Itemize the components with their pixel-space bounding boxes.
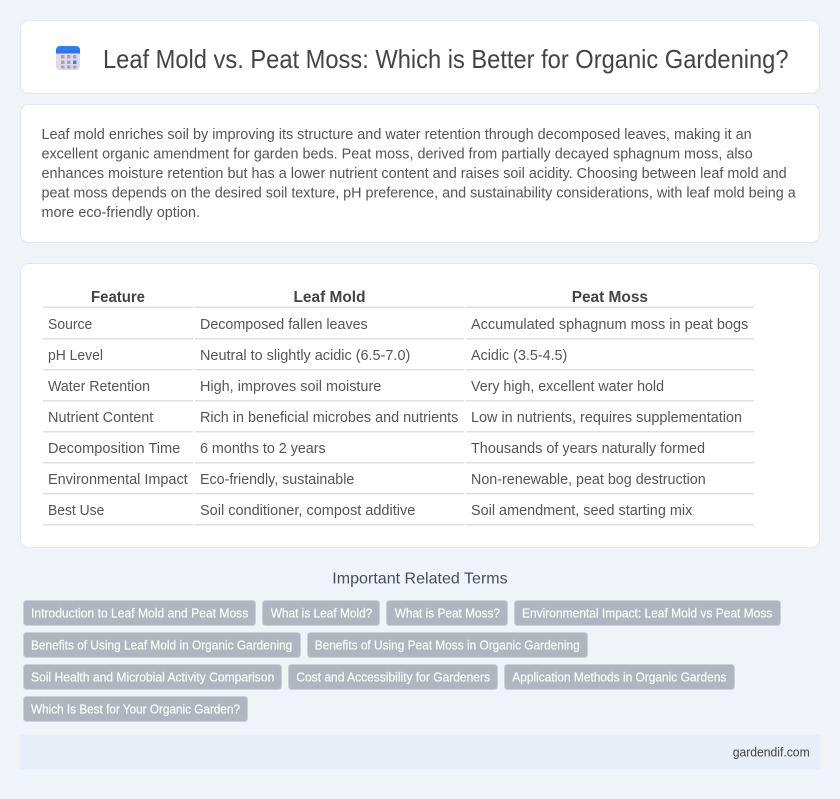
row: nutrient content: Nutrient Content <box>48 410 153 426</box>
row: source: Decomposed fallen leaves <box>200 317 368 333</box>
intro paragraph: Leaf mold enriches soil by improving its structure and water retention through decomposed leaves, making it an <box>42 127 752 143</box>
tag: benefits of peat moss: Benefits of Using Peat Moss in Organic Gardening <box>315 637 580 652</box>
tag: cost and accessibility <box>288 664 498 690</box>
row: environmental impact: Environmental Impact <box>48 472 188 488</box>
panel: related term tags <box>24 600 780 722</box>
row: source: Source <box>48 317 92 333</box>
tag: what is leaf mold: What is Leaf Mold? <box>271 605 372 620</box>
row: pH level <box>43 348 754 370</box>
tag: benefits of peat moss <box>308 632 588 658</box>
row: pH level: pH Level <box>48 348 103 364</box>
intro paragraph: peat moss depends on the desired soil texture, pH preference, and sustainability considerations, with leaf mold being a <box>42 186 796 202</box>
row: water retention: Very high, excellent water hold <box>471 379 664 395</box>
row: best use <box>43 503 754 526</box>
table header row <box>43 289 754 308</box>
row: source: Accumulated sphagnum moss in peat bogs <box>471 317 748 333</box>
intro paragraph: more eco-friendly option. <box>42 205 200 221</box>
table header row: Leaf Mold <box>294 289 366 306</box>
icon: calendar <box>56 46 80 70</box>
table header row: Peat Moss <box>572 289 648 306</box>
row: water retention <box>43 379 754 402</box>
row: decomposition time: 6 months to 2 years <box>200 441 326 457</box>
row: nutrient content <box>43 410 754 432</box>
tag: which is best: Which Is Best for Your Organic Garden? <box>31 701 240 716</box>
tag: what is leaf mold <box>262 600 380 626</box>
tag: what is peat moss <box>386 600 508 626</box>
row: best use: Soil conditioner, compost additive <box>200 503 415 519</box>
intro paragraph: excellent organic amendment for garden beds. Peat moss, derived from partially decayed sphagnum moss, also <box>42 146 753 162</box>
tag: environmental impact: Environmental Impact: Leaf Mold vs Peat Moss <box>522 605 772 620</box>
row: best use: Best Use <box>48 503 104 519</box>
heading: important related terms: Important Related Terms <box>332 570 508 587</box>
table header row: Feature <box>91 289 145 306</box>
tag: what is peat moss: What is Peat Moss? <box>395 605 500 620</box>
tag: application methods <box>504 664 734 690</box>
row: environmental impact <box>43 472 754 494</box>
row: best use: Soil amendment, seed starting mix <box>471 503 693 519</box>
row: decomposition time <box>43 441 754 464</box>
row: nutrient content: Rich in beneficial microbes and nutrients <box>200 410 458 426</box>
panel: comparison table <box>20 264 820 548</box>
tag: soil health <box>24 664 282 690</box>
intro paragraph <box>42 127 796 221</box>
tag: which is best <box>24 696 248 722</box>
row: source <box>43 317 754 340</box>
intro paragraph: enhances moisture retention but has a lower nutrient content and raises soil acidity. Choosing between leaf mold and <box>42 166 787 182</box>
row: environmental impact: Eco-friendly, sustainable <box>200 472 354 488</box>
tag: soil health: Soil Health and Microbial Activity Comparison <box>31 669 274 684</box>
tag: benefits of leaf mold <box>24 632 300 658</box>
row: environmental impact: Non-renewable, peat bog destruction <box>471 472 706 488</box>
footer bar <box>20 735 820 769</box>
row: pH level: Neutral to slightly acidic (6.5-7.0) <box>200 348 410 364</box>
row: decomposition time: Decomposition Time <box>48 441 180 457</box>
tag: benefits of leaf mold: Benefits of Using Leaf Mold in Organic Gardening <box>31 637 292 652</box>
tag: environmental impact <box>514 600 780 626</box>
panel: title header <box>20 20 820 94</box>
tag: application methods: Application Methods in Organic Gardens <box>512 669 726 684</box>
row: decomposition time: Thousands of years naturally formed <box>471 441 705 457</box>
tag: introduction: Introduction to Leaf Mold and Peat Moss <box>31 605 248 620</box>
title: Leaf Mold vs. Peat Moss: Which is Better for Organic Gardening? <box>103 46 788 74</box>
row: nutrient content: Low in nutrients, requires supplementation <box>471 410 742 426</box>
panel: introduction text <box>20 104 820 242</box>
footer site name: gardendif.com <box>733 745 810 760</box>
row: pH level: Acidic (3.5-4.5) <box>471 348 567 364</box>
tag: cost and accessibility: Cost and Accessibility for Gardeners <box>296 669 490 684</box>
tag: introduction <box>24 600 256 626</box>
row: water retention: Water Retention <box>48 379 150 395</box>
row: water retention: High, improves soil moisture <box>200 379 381 395</box>
